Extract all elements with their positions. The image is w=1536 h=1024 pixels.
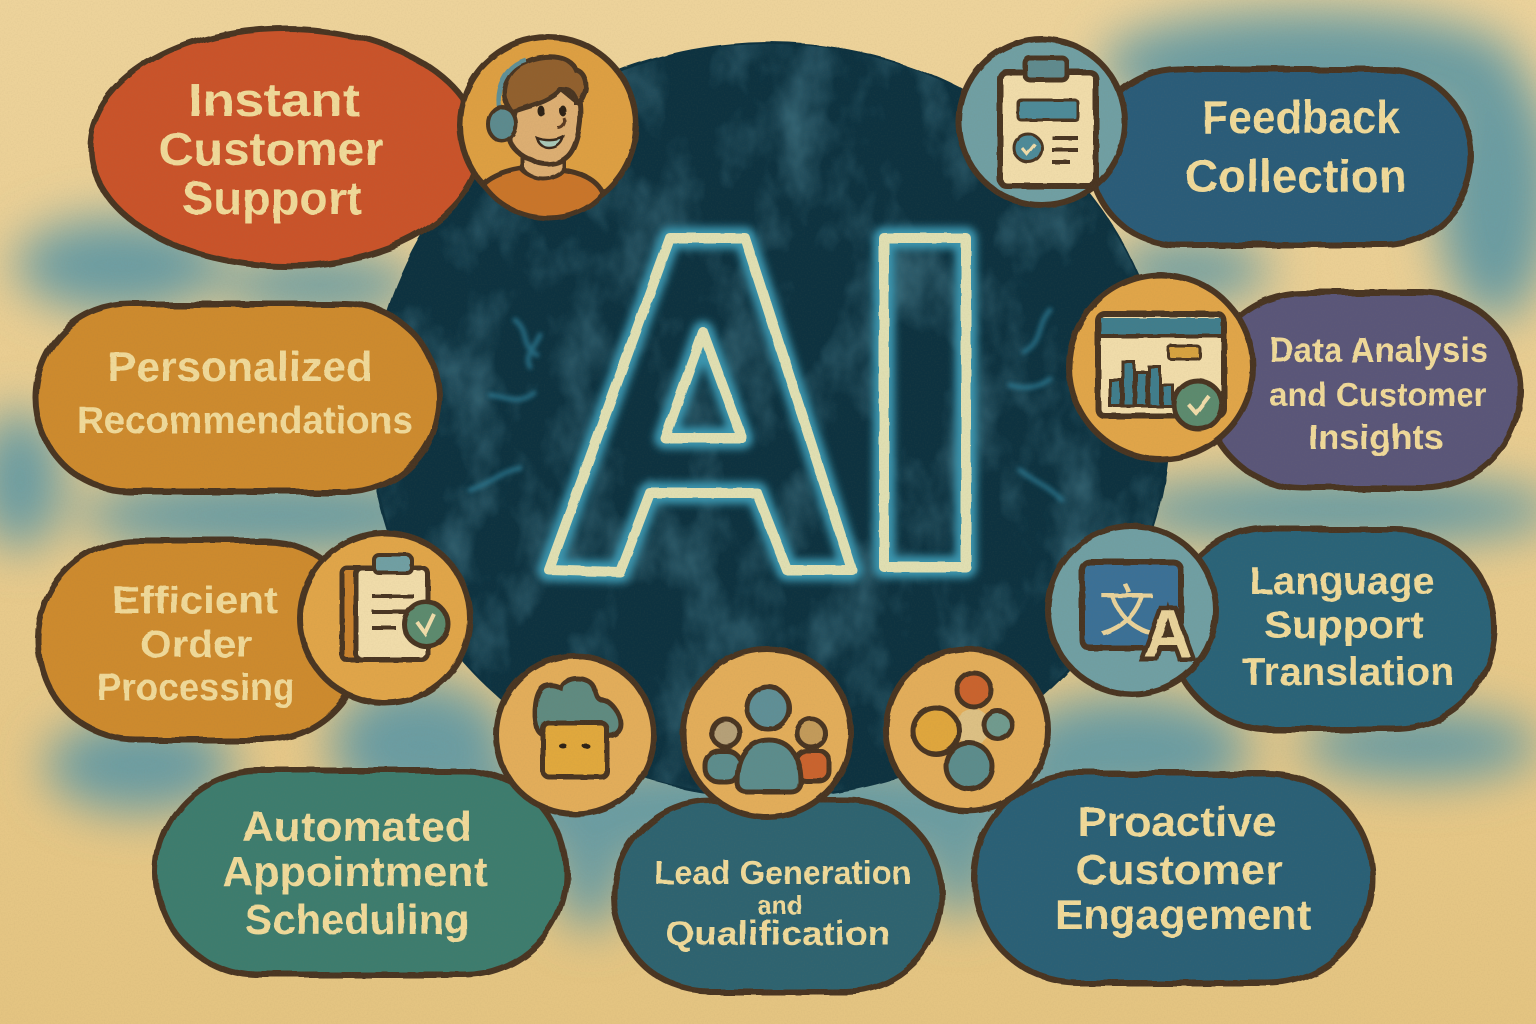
panel: Feedback Collection [1090,69,1472,245]
panel: Data Analysis and Customer Insights: Data Analysis [1270,331,1488,370]
panel: Language Support Translation: Translation [1242,651,1454,694]
panel: Lead Generation and Qualification: Lead Generation [654,854,912,891]
panel: Lead Generation and Qualification [614,800,942,992]
panel: Efficient Order Processing: Order [140,624,252,666]
panel: Proactive Customer Engagement: Proactive [1078,798,1276,845]
panel: Automated Appointment Scheduling: Automated [242,803,472,850]
panel: Feedback Collection: Feedback [1202,91,1400,143]
panel: Proactive Customer Engagement: Engagement [1055,891,1311,938]
panel: Proactive Customer Engagement: Customer [1076,846,1282,893]
panel: Data Analysis and Customer Insights: Insights [1308,418,1444,457]
icon: data chart with check [1069,275,1253,459]
icon: engagement circles [886,649,1048,811]
panel: Efficient Order Processing: Processing [97,667,295,709]
panel: Automated Appointment Scheduling: Scheduling [244,896,470,943]
panel: Data Analysis and Customer Insights [1205,293,1520,488]
icon: support agent with headset [460,37,636,218]
panel: Instant Customer Support [90,28,480,266]
panel: Efficient Order Processing [38,541,363,740]
panel: Data Analysis and Customer Insights: and Customer [1270,376,1487,413]
icon: translation: 文 [1099,580,1155,643]
panel: Personalized Recommendations: Recommendations [77,400,413,442]
panel: Language Support Translation: Language [1250,560,1434,603]
panel: Feedback Collection: Collection [1185,150,1407,202]
icon: order checklist [300,533,470,703]
panel: Efficient Order Processing: Efficient [112,580,278,622]
icon: people group [683,649,851,817]
panel: Automated Appointment Scheduling [156,771,566,975]
panel: Instant Customer Support: Support [182,172,362,224]
icon: scheduling bot [496,656,654,814]
central dark AI circle [360,40,1180,810]
panel: Lead Generation and Qualification: Qualification [666,915,890,953]
panel: Personalized Recommendations: Personalized [108,343,372,390]
panel: Lead Generation and Qualification: and [758,890,802,920]
panel: Proactive Customer Engagement [974,774,1372,983]
title: AI [549,238,966,572]
icon: feedback clipboard [959,39,1125,205]
icon: translation [1048,526,1216,694]
panel: Automated Appointment Scheduling: Appointment [222,848,488,895]
panel: Instant Customer Support: Instant [188,74,360,126]
panel: Personalized Recommendations [36,304,439,492]
panel: Language Support Translation [1170,529,1495,729]
panel: Language Support Translation: Support [1264,604,1424,647]
icon: translation: A [1143,596,1193,672]
AI neon glow [549,238,966,572]
panel: Instant Customer Support: Customer [158,123,384,175]
